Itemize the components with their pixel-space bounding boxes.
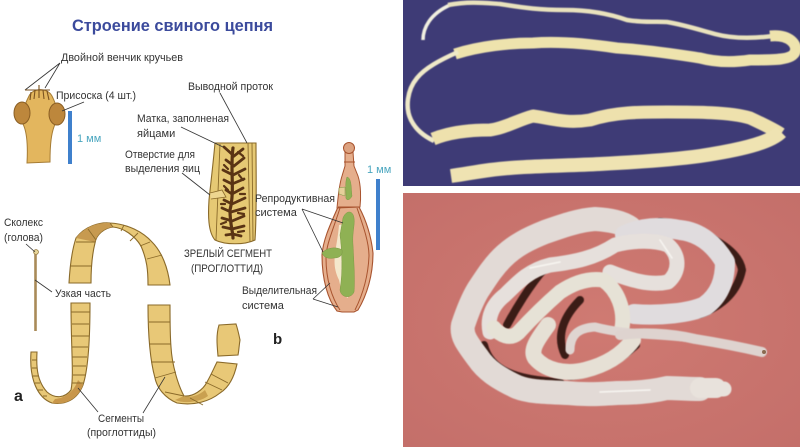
caption: mature segment: ЗРЕЛЫЙ СЕГМЕНТ <box>184 247 272 260</box>
label: excretory duct: Выводной проток <box>188 81 273 93</box>
caption: mature segment <box>184 247 272 275</box>
letter a: a <box>14 388 23 405</box>
label: double crown of hooks <box>25 52 183 90</box>
label: excretory system: Выделительная <box>242 285 317 297</box>
caption: mature segment: (ПРОГЛОТТИД) <box>191 263 263 275</box>
worm strands <box>408 3 796 176</box>
label: scolex head: Сколекс <box>4 217 43 229</box>
label: excretory system <box>242 283 338 312</box>
label: uterus filled with eggs: Матка, заполненая <box>137 113 229 125</box>
diagram: mature segment <box>125 81 273 275</box>
photo: tapeworm on blue background <box>403 0 800 186</box>
label: excretory system: система <box>242 300 285 312</box>
diagram: scolex <box>14 52 183 164</box>
worm head tip <box>762 350 766 354</box>
thin neck <box>34 250 38 331</box>
scale bar: 1 mm <box>367 164 391 250</box>
reproductive system <box>322 177 354 297</box>
label: uterus filled with eggs <box>137 113 229 147</box>
label: uterus filled with eggs: яйцами <box>137 128 175 140</box>
label: sucker <box>56 90 136 111</box>
label: reproductive system: система <box>255 207 298 219</box>
label: narrow part <box>35 280 111 300</box>
label: egg opening <box>125 149 210 195</box>
label: excretory duct <box>188 81 273 143</box>
upper arch of strobila <box>69 223 170 285</box>
label: segments <box>78 377 165 439</box>
scale bar: 1 mm: 1 мм <box>77 133 101 145</box>
label: reproductive system: Репродуктивная <box>255 193 335 205</box>
label: egg opening: Отверстие для <box>125 149 195 161</box>
proglottid body <box>322 142 373 312</box>
label: reproductive system <box>255 193 343 252</box>
scale bar: 1 mm: 1 мм <box>367 164 391 176</box>
photo: tapeworm on pink background <box>403 193 800 447</box>
label: scolex head <box>4 217 43 252</box>
worm shadows <box>484 222 742 382</box>
segment body <box>209 143 256 244</box>
label: egg opening: выделения яиц <box>125 163 201 175</box>
lower left strobila <box>31 303 90 403</box>
label: narrow part: Узкая часть <box>55 288 111 300</box>
label: segments: Сегменты <box>98 413 144 425</box>
letter b: b <box>273 331 282 348</box>
diagram: proglottid b <box>242 142 391 348</box>
uterus with eggs <box>221 147 245 238</box>
panel: tapeworm structure diagram <box>4 16 391 439</box>
pale worm body <box>463 219 762 394</box>
label: segments: (проглоттиды) <box>87 427 156 439</box>
worm highlights <box>530 240 672 392</box>
diagram: whole worm a <box>4 217 240 439</box>
label: sucker: Присоска (4 шт.) <box>56 90 136 102</box>
scolex body <box>14 85 65 163</box>
detached segment <box>217 324 240 356</box>
label: double crown of hooks: Двойной венчик кручьев <box>61 52 183 64</box>
title: Строение свиного цепня <box>72 16 273 35</box>
scale bar: 1 mm <box>68 111 101 164</box>
lower right strobila <box>148 305 237 405</box>
label: scolex head: (голова) <box>4 232 43 244</box>
